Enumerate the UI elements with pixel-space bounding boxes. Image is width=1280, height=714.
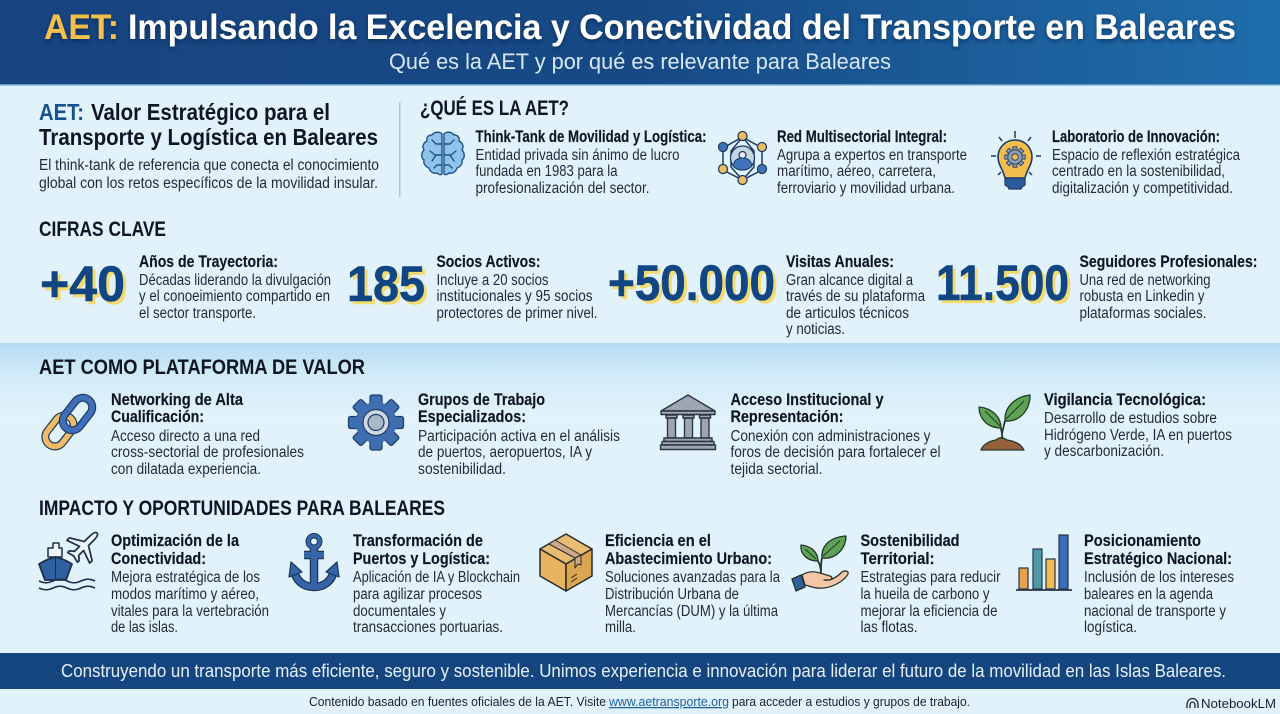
item: vigilancia [979, 391, 1232, 460]
stat text: plataformas sociales. [1080, 305, 1206, 322]
item text: Aplicación de IA y Blockchain [353, 569, 520, 586]
stat text: Una red de networking [1080, 272, 1210, 289]
item text: transacciones portuarias. [353, 619, 503, 636]
item text: sostenibilidad. [418, 461, 506, 478]
stat: seguidores [936, 253, 1258, 322]
item text: baleares en la agenda [1084, 586, 1213, 603]
icon: sprout [979, 395, 1030, 450]
intro description: global con los retos específicos de la movilidad insular. [39, 175, 378, 192]
item: abastecimiento [540, 532, 780, 636]
source note: para acceder a estudios y grupos de trabajo. [732, 695, 970, 709]
heading: qué es la AET: ¿QUÉ ES LA AET? [420, 97, 569, 120]
stat text: de articulos técnicos [786, 305, 909, 322]
number +40: +40 [40, 256, 125, 312]
icon: notebook mark [1187, 698, 1198, 708]
item text: documentales y [353, 603, 446, 620]
item text: y descarbonización. [1044, 443, 1164, 460]
stat text: y noticias. [786, 321, 845, 338]
item: puertos [289, 532, 520, 636]
stat text: Gran alcance digital a [786, 272, 913, 289]
item text [860, 532, 1000, 636]
item text: Especializados: [418, 408, 526, 426]
item text: Laboratorio de Innovación: [1052, 128, 1220, 146]
item: sostenibilidad [792, 532, 1000, 636]
icon: chain link [42, 394, 96, 450]
item text: Mejora estratégica de los [111, 569, 260, 586]
intro heading [39, 99, 378, 150]
item text: Acceso directo a una red [111, 428, 260, 445]
item text: Conexión con administraciones y [730, 428, 931, 445]
stat text: protectores de primer nivel. [436, 305, 598, 322]
item text: nacional de transporte y [1084, 603, 1226, 620]
item: red multisectorial [718, 128, 967, 197]
stat text: través de su plataforma [786, 288, 925, 305]
intro heading: Valor Estratégico para el [91, 99, 330, 125]
icon: cardboard box [540, 534, 592, 591]
panel: intro [39, 99, 379, 192]
item: networking [42, 391, 304, 478]
heading: plataforma de valor: AET COMO PLATAFORMA DE VALOR [39, 356, 365, 379]
item text: Agrupa a expertos en transporte [777, 147, 967, 164]
item text: Espacio de reflexión estratégica [1052, 147, 1240, 164]
stat text: Décadas liderando la divulgación [139, 272, 331, 289]
item text: Hidrógeno Verde, IA en puertos [1044, 427, 1232, 444]
stat: socios [347, 253, 598, 322]
item: think-tank [422, 128, 706, 197]
icon: anchor [289, 536, 339, 587]
stat text [139, 253, 331, 322]
item text: mejorar la eficiencia de [860, 603, 998, 620]
number +50.000: +50.000 [608, 255, 775, 311]
item text: cross-sectorial de profesionales [111, 444, 304, 461]
item text: Distribución Urbana de [605, 586, 739, 603]
item text [418, 391, 620, 478]
item text: Estratégico Nacional: [1084, 550, 1232, 568]
item text: de las islas. [111, 619, 178, 636]
stat: visitas [608, 253, 925, 338]
intro heading: AET: [39, 99, 84, 125]
item text: Desarrollo de estudios sobre [1044, 410, 1217, 427]
item text [730, 391, 940, 478]
item text: Networking de Alta [111, 391, 244, 409]
item text: Abastecimiento Urbano: [605, 550, 772, 568]
item text: Grupos de Trabajo [418, 391, 545, 409]
item text [1044, 391, 1232, 460]
item text: modos marítimo y aéreo, [111, 586, 259, 603]
number 11.500: 11.500 [936, 255, 1069, 311]
item text: profesionalización del sector. [476, 180, 650, 197]
item: grupos [348, 391, 620, 478]
item text [1052, 128, 1240, 197]
item text: para agilizar procesos [353, 586, 482, 603]
icon: ship and plane [39, 522, 108, 590]
item text: tejida sectorial. [730, 461, 822, 478]
item text: vitales para la vertebración [111, 603, 269, 620]
item text: centrado en la sostenibilidad, [1052, 163, 1225, 180]
intro description [39, 157, 379, 192]
item text: Vigilancia Tecnológica: [1044, 391, 1206, 409]
stat: años [40, 253, 331, 322]
icon: gear [348, 395, 404, 450]
stat text: Socios Activos: [436, 253, 540, 271]
icon: light bulb [991, 131, 1041, 189]
item text: fundada en 1983 para la [476, 163, 618, 180]
footer banner [0, 653, 1280, 689]
item text: Entidad privada sin ánimo de lucro [476, 147, 680, 164]
item text: con dilatada experiencia. [111, 461, 261, 478]
stat text: institucionales y 95 socios [436, 288, 593, 305]
item text [111, 391, 304, 478]
icon: brain [422, 132, 464, 175]
item text: las flotas. [860, 619, 918, 636]
item text: Estrategias para reducir [860, 569, 1000, 586]
item: conectividad [39, 522, 269, 636]
item text [605, 532, 780, 636]
item: laboratorio [991, 128, 1240, 197]
item text: Mercancías (DUM) y la última [605, 603, 778, 620]
item text: Red Multisectorial Integral: [777, 128, 947, 146]
item: acceso institucional [660, 391, 940, 478]
icon: network [718, 132, 766, 184]
stat text: el sector transporte. [139, 305, 256, 322]
item text: Think-Tank de Movilidad y Logística: [476, 128, 706, 146]
item text: ferroviario y movilidad urbana. [777, 180, 955, 197]
item text [476, 128, 706, 197]
item text: Cualificación: [111, 408, 204, 426]
item text [111, 532, 269, 636]
header banner [0, 0, 1280, 86]
item text: milla. [605, 619, 636, 636]
panel: plataforma de valor [39, 356, 1232, 478]
item text: Participación activa en el análisis [418, 428, 620, 445]
item text: Representación: [730, 408, 844, 426]
item text: Transformación de [353, 532, 483, 550]
icon: institution building [660, 395, 716, 450]
stat text: y el conoeimiento compartido en [139, 288, 330, 305]
icon: bar chart [1016, 535, 1072, 590]
stat text: Incluye a 20 socios [436, 272, 549, 289]
subtitle: Qué es la AET y por qué es relevante para Baleares [389, 49, 891, 74]
heading: impacto: IMPACTO Y OPORTUNIDADES PARA BALEARES [39, 497, 445, 520]
panel: qué es la AET [420, 97, 1240, 197]
source note [309, 695, 970, 709]
panel: cifras clave [39, 218, 1258, 338]
item text [353, 532, 520, 636]
stat text: robusta en Linkedin y [1080, 288, 1205, 305]
item text: Soluciones avanzadas para la [605, 569, 780, 586]
item text: Eficiencia en el [605, 532, 711, 550]
source note: Contenido basado en fuentes oficiales de la AET. Visite [309, 695, 606, 709]
panel: impacto y oportunidades [39, 497, 1234, 636]
item text: de puertos, aeropuertos, IA y [418, 444, 592, 461]
item text: Puertos y Logística: [353, 550, 490, 568]
item text: Territorial: [860, 550, 934, 568]
title: AET: [44, 8, 119, 47]
title: Impulsando la Excelencia y Conectividad del Transporte en Baleares [128, 8, 1236, 47]
number 185: 185 [347, 256, 425, 312]
NotebookLM logo: NotebookLM [1201, 697, 1276, 711]
icon: hand with sprout [792, 536, 848, 591]
item text: Acceso Institucional y [730, 391, 884, 409]
item text: foros de decisión para fortalecer el [730, 444, 940, 461]
stat text: Años de Trayectoria: [139, 253, 278, 271]
item text: la hueila de carbono y [860, 586, 990, 603]
heading: cifras clave: CIFRAS CLAVE [39, 218, 166, 241]
item text [777, 128, 967, 197]
item text: digitalización y competitividad. [1052, 180, 1233, 197]
stat text [1080, 253, 1258, 322]
item text: marítimo, aéreo, carretera, [777, 163, 936, 180]
item text: Conectividad: [111, 550, 206, 568]
stat text [786, 253, 925, 338]
item text: logística. [1084, 619, 1137, 636]
source note: www.aetransporte.org [608, 695, 729, 709]
item text: Posicionamiento [1084, 532, 1201, 550]
stat text [436, 253, 598, 322]
item text: Sostenibilidad [860, 532, 960, 550]
item text: Optimización de la [111, 532, 240, 550]
stat text: Visitas Anuales: [786, 253, 894, 271]
item text [1084, 532, 1234, 636]
intro heading: Transporte y Logística en Baleares [39, 124, 378, 150]
intro description: El think-tank de referencia que conecta el conocimiento [39, 157, 379, 174]
item: posicionamiento [1016, 532, 1234, 636]
item text: Inclusión de los intereses [1084, 569, 1234, 586]
